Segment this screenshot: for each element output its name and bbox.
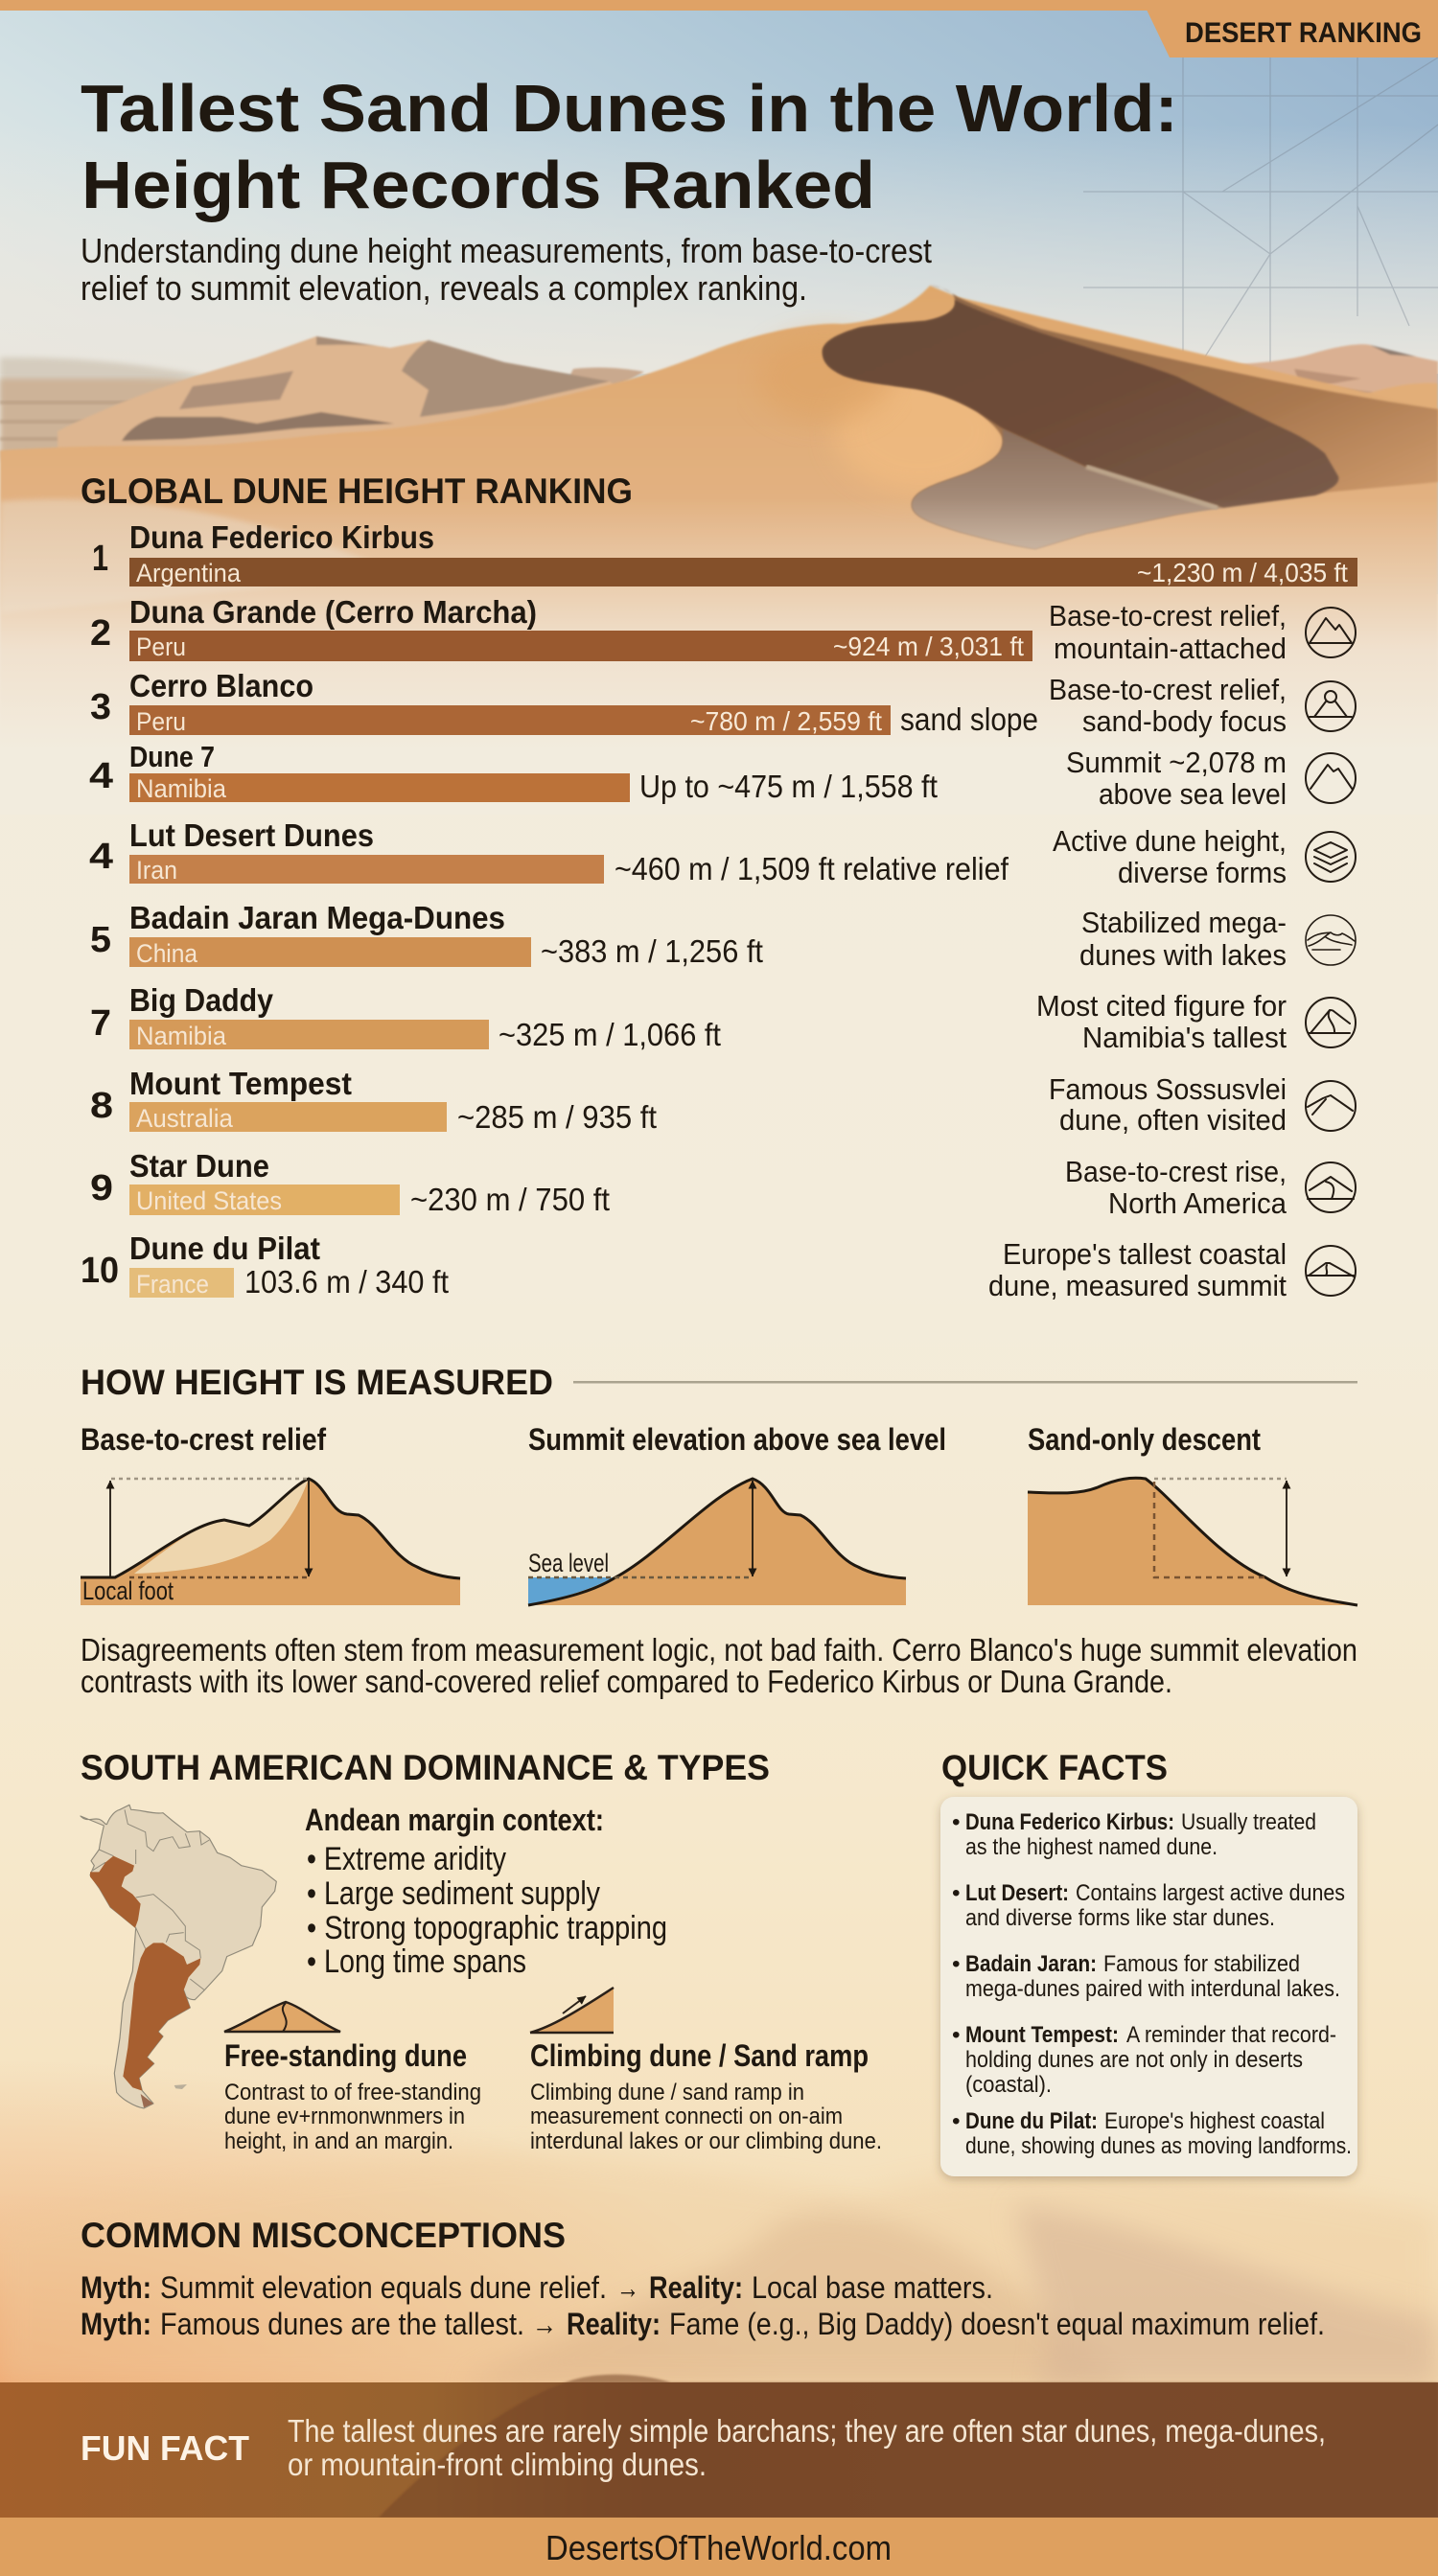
icon: coastal dune [1306,1246,1356,1296]
icon: rise [1306,1162,1356,1212]
subtitle: Understanding dune height measurements, from base-to-crest [81,231,932,270]
row 8: Mount Tempest: 8 [90,1086,113,1126]
icon: layers [1306,832,1356,882]
row 6: Badain Jaran: Badain Jaran Mega-Dunes [129,900,505,935]
row 7: Big Daddy: Namibia's tallest [1082,1021,1287,1054]
type: free-standing dune [224,2002,481,2154]
row 9: Star Dune: Base-to-crest rise, [1065,1155,1287,1188]
row 5: Lut Desert: diverse forms [1118,856,1287,889]
row 4: Dune 7: above sea level [1099,777,1287,811]
misconceptions list [81,2270,1325,2341]
row 10: Dune du Pilat: Europe's tallest coastal [1003,1237,1287,1271]
diagram: base-to-crest relief [81,1422,460,1605]
row 5: Lut Desert: Lut Desert Dunes [129,817,374,853]
map: South America [81,1805,276,2108]
row 4: Dune 7: Dune 7 [129,740,215,773]
fact: Lut Desert: and diverse forms like star dunes. [965,1905,1275,1931]
misconceptions list: Reality: [649,2270,743,2305]
row 1: Duna Federico Kirbus: 1 [92,539,108,579]
row 4: Dune 7: 4 [89,756,113,796]
fact: Mount Tempest: Mount Tempest: [965,2022,1119,2048]
row 1: Duna Federico Kirbus: Argentina [136,559,242,587]
fact: Badain Jaran: Famous for stabilized [1103,1951,1300,1977]
row 2: Duna Grande: mountain-attached [1054,632,1287,665]
row 2: Duna Grande: ~924 m / 3,031 ft [833,632,1024,661]
category tag [1147,10,1438,58]
icon: mega dunes and lakes [1306,915,1356,965]
fact: Mount Tempest [952,2022,1336,2098]
fact: Mount Tempest: A reminder that record- [1126,2022,1336,2048]
row 8: Mount Tempest: Mount Tempest [129,1066,352,1101]
category tag: DESERT RANKING [1185,17,1422,49]
lower sand ridges [0,499,403,613]
row 8: Mount Tempest: dune, often visited [1059,1103,1287,1137]
row 6: Badain Jaran: 5 [90,920,111,960]
row 6: Badain Jaran: dunes with lakes [1079,938,1287,972]
heading: common misconceptions: COMMON MISCONCEPTIONS [81,2216,566,2255]
row 7: Big Daddy: 7 [90,1003,111,1044]
fact: Dune du Pilat: Europe's highest coastal [1104,2108,1325,2134]
row 6: Badain Jaran [90,900,1287,972]
heading: global ranking: GLOBAL DUNE HEIGHT RANKING [81,472,633,511]
sunlit glow on crest [834,369,1007,494]
row 9: Star Dune: United States [136,1186,282,1215]
row 1: Duna Federico Kirbus: ~1,230 m / 4,035 ft [1137,558,1348,587]
fact: Dune du Pilat: • [952,2108,961,2134]
fact: Duna Federico Kirbus: Usually treated [1181,1809,1316,1835]
survey grid lines [1083,58,1438,364]
row 2: Duna Grande [90,594,1287,665]
Andean context list: • Strong topographic trapping [307,1910,667,1946]
row 10: Dune du Pilat [81,1230,1287,1302]
type: free-standing dune: Contrast to of free-standing [224,2080,481,2105]
row 5: Lut Desert: Iran [136,856,177,885]
icon: big dune [1306,998,1356,1047]
fact: Lut Desert: • [952,1880,961,1906]
row 10: Dune du Pilat: dune, measured summit [988,1269,1287,1302]
row 3: Cerro Blanco: ~780 m / 2,559 ft [690,706,882,736]
misconceptions list: → [616,2270,639,2305]
fact: Duna Federico Kirbus [952,1809,1316,1860]
type: climbing dune [530,1988,882,2154]
main dune sunlit face [0,286,1438,800]
row 6: Badain Jaran: China [136,939,198,968]
fact: Lut Desert: Contains largest active dunes [1076,1880,1345,1906]
row 9: Star Dune: ~230 m / 750 ft [410,1182,610,1217]
sand streak [1086,467,1218,508]
subtitle: relief to summit elevation, reveals a complex ranking. [81,268,807,308]
row 10: Dune du Pilat: 10 [81,1251,119,1291]
fact: Dune du Pilat: Dune du Pilat: [965,2108,1098,2134]
row 9: Star Dune: North America [1108,1186,1287,1220]
misconceptions list: Myth: [81,2270,151,2305]
row 3: Cerro Blanco: sand slope [900,702,1038,737]
row 8: Mount Tempest: Famous Sossusvlei [1049,1072,1287,1106]
title [81,71,1178,222]
panel: ranking rows [81,519,1357,1302]
row 8: Mount Tempest [90,1066,1287,1137]
left dunes [58,336,644,460]
row 5: Lut Desert: ~460 m / 1,509 ft relative relief [615,851,1009,886]
Andean context list [305,1803,667,1980]
row 3: Cerro Blanco: Peru [136,707,186,736]
fact: Mount Tempest: holding dunes are not only in deserts [965,2047,1303,2073]
type: free-standing dune: height, in and an margin. [224,2128,453,2154]
row 5: Lut Desert: Active dune height, [1053,824,1287,858]
Andean context list: Andean margin context: [305,1803,604,1837]
Andean context list: • Extreme aridity [307,1841,506,1877]
row 1: Duna Federico Kirbus [92,519,1357,587]
fact: Badain Jaran: Badain Jaran: [965,1951,1097,1977]
Andean context list: • Long time spans [307,1944,526,1980]
fun fact band: FUN FACT [81,2428,249,2468]
fact: Lut Desert: Lut Desert: [965,1880,1069,1906]
row 2: Duna Grande: 2 [90,613,111,654]
measurement explanation text: contrasts with its lower sand-covered relief compared to Federico Kirbus or Duna Grande. [81,1664,1172,1699]
lower light shadow band [912,428,1223,549]
row 4: Dune 7 [89,740,1287,811]
row 5: Lut Desert [89,817,1287,889]
row 9: Star Dune [90,1148,1287,1220]
misconceptions list: Fame (e.g., Big Daddy) doesn't equal maximum relief. [669,2307,1325,2341]
fact: Badain Jaran: mega-dunes paired with interdunal lakes. [965,1976,1340,2002]
row 7: Big Daddy: Big Daddy [129,982,274,1018]
row 4: Dune 7: Up to ~475 m / 1,558 ft [639,769,938,804]
subtitle [81,231,932,308]
misconceptions list: → [532,2307,557,2341]
misconceptions list: Myth: [81,2307,151,2341]
heading: south american dominance: SOUTH AMERICAN DOMINANCE & TYPES [81,1748,770,1787]
diagram: base-to-crest relief: Local foot [82,1576,174,1605]
row 10: Dune du Pilat: Dune du Pilat [129,1230,320,1266]
diagram: sand-only descent: Sand-only descent [1028,1422,1261,1457]
row 7: Big Daddy: Most cited figure for [1036,989,1287,1023]
panel: quick facts [940,1797,1357,2176]
row 1: Duna Federico Kirbus: Duna Federico Kirbus [129,519,434,555]
fact: Dune du Pilat [952,2108,1352,2159]
diagram: summit elevation above sea level: Sea level [528,1549,609,1577]
fact: Duna Federico Kirbus: • [952,1809,961,1835]
row 6: Badain Jaran: Stabilized mega- [1081,906,1287,939]
row 7: Big Daddy: Namibia [136,1022,227,1050]
heading: how height is measured: HOW HEIGHT IS MEASURED [81,1363,553,1402]
horizon haze [0,357,206,402]
fact: Dune du Pilat: dune, showing dunes as moving landforms. [965,2133,1352,2159]
icon: mountain attached [1306,608,1356,657]
row 3: Cerro Blanco: sand-body focus [1082,704,1287,738]
fact: Badain Jaran [952,1951,1340,2002]
row 9: Star Dune: Star Dune [129,1148,269,1184]
row 8: Mount Tempest: Australia [136,1104,234,1133]
title: Height Records Ranked [81,148,875,222]
fact: Duna Federico Kirbus: as the highest named dune. [965,1834,1218,1860]
diagram: base-to-crest relief: Base-to-crest relief [81,1422,326,1457]
row 9: Star Dune: 9 [90,1168,113,1208]
row 8: Mount Tempest: ~285 m / 935 ft [457,1099,657,1135]
row 2: Duna Grande: Duna Grande (Cerro Marcha) [129,594,537,630]
footer [0,2518,1438,2576]
measurement explanation text [81,1632,1357,1699]
row 7: Big Daddy: ~325 m / 1,066 ft [499,1017,721,1052]
row 4: Dune 7: Namibia [136,774,227,803]
hero fade into page [0,498,1438,815]
row 10: Dune du Pilat: France [136,1270,209,1299]
fun fact band: or mountain-front climbing dunes. [288,2447,707,2482]
heading: quick facts: QUICK FACTS [941,1748,1168,1787]
row 3: Cerro Blanco: 3 [90,687,111,727]
misconceptions list: Summit elevation equals dune relief. [160,2270,607,2305]
row 3: Cerro Blanco: Base-to-crest relief, [1049,673,1287,706]
row 5: Lut Desert: 4 [89,837,113,877]
row 10: Dune du Pilat: 103.6 m / 340 ft [244,1264,449,1300]
misconceptions list: Reality: [567,2307,661,2341]
row 2: Duna Grande: Base-to-crest relief, [1049,599,1287,632]
type: climbing dune: interdunal lakes or our climbing dune. [530,2128,882,2154]
type: climbing dune: measurement connecti on on-aim [530,2104,843,2129]
fact: Duna Federico Kirbus: Duna Federico Kirbus: [965,1809,1174,1835]
icon: sand body [1306,681,1356,731]
row 2: Duna Grande: Peru [136,632,186,661]
Andean context list: • Large sediment supply [307,1875,600,1912]
row 6: Badain Jaran: ~383 m / 1,256 ft [541,933,763,969]
diagram: summit elevation above sea level [528,1422,946,1605]
footer: DesertsOfTheWorld.com [545,2528,892,2567]
fact: Lut Desert [952,1880,1345,1931]
distant right dune [1200,344,1438,426]
type: climbing dune: Climbing dune / sand ramp in [530,2080,804,2105]
fact: Mount Tempest: (coastal). [965,2072,1052,2098]
title: Tallest Sand Dunes in the World: [81,71,1178,146]
row 3: Cerro Blanco [90,668,1287,738]
icon: summit [1306,753,1356,803]
dark slip face core [823,300,1338,508]
row 4: Dune 7: Summit ~2,078 m [1066,746,1287,779]
type: free-standing dune: dune ev+rnmonwnmers in [224,2104,465,2129]
icon: ridge [1306,1081,1356,1131]
bottom desert backdrop [0,2060,1438,2386]
fact: Mount Tempest: • [952,2022,961,2048]
fact: Badain Jaran: • [952,1951,961,1977]
top band [0,0,1438,11]
row 7: Big Daddy [90,982,1287,1054]
row 3: Cerro Blanco: Cerro Blanco [129,668,313,703]
type: climbing dune: Climbing dune / Sand ramp [530,2038,869,2073]
diagram: summit elevation above sea level: Summit elevation above sea level [528,1422,946,1457]
type: free-standing dune: Free-standing dune [224,2038,467,2073]
diagram: sand-only descent [1028,1422,1357,1605]
fun fact band [0,2375,1438,2518]
main dune lee side [823,286,1438,549]
misconceptions list: Famous dunes are the tallest. [160,2307,524,2341]
hero desert landscape [0,0,1438,815]
misconceptions list: Local base matters. [752,2270,993,2305]
